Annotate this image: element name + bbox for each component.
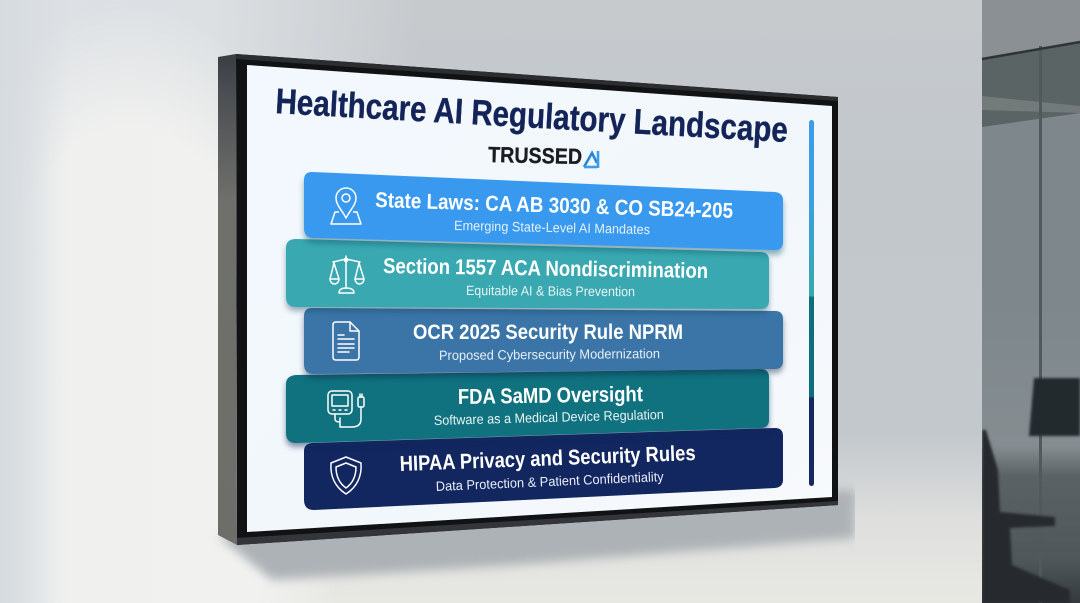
band: FDA [286, 369, 769, 447]
heading: OCR 2025 Security Rule NPRM [413, 320, 683, 344]
subheading: Software as a Medical Device Regulation [434, 407, 664, 428]
icon: logo mark [584, 151, 598, 168]
background: office chair [982, 430, 1070, 603]
display frame [218, 54, 838, 545]
icon: shield [331, 457, 361, 494]
background: glass office partition [982, 0, 1080, 603]
band: HIPAA [304, 428, 783, 510]
icon: medical device [328, 391, 364, 427]
frame side face [218, 54, 237, 545]
heading: State Laws: CA AB 3030 & CO SB24-205 [375, 188, 733, 223]
subheading: Proposed Cybersecurity Modernization [439, 346, 660, 363]
subheading: Equitable AI & Bias Prevention [466, 283, 635, 299]
progress rail [809, 120, 814, 486]
logo: TrussedAI: TRUSSED [488, 142, 582, 169]
icon: scales of justice [330, 256, 364, 293]
heading: FDA SaMD Oversight [458, 382, 643, 409]
band: State Laws [304, 172, 783, 255]
band: Section 1557 [286, 239, 769, 313]
frame shadow [218, 490, 855, 580]
title: Healthcare AI Regulatory Landscape [275, 81, 789, 150]
band: OCR [304, 308, 783, 378]
subheading: Data Protection & Patient Confidentiality [435, 469, 664, 494]
icon: map pin [331, 188, 361, 224]
heading: HIPAA Privacy and Security Rules [399, 441, 696, 476]
screen surface [247, 65, 832, 532]
heading: Section 1557 ACA Nondiscrimination [383, 254, 708, 283]
subheading: Emerging State-Level AI Mandates [454, 218, 650, 237]
background: monitor [1029, 378, 1080, 436]
icon: document [333, 322, 359, 360]
